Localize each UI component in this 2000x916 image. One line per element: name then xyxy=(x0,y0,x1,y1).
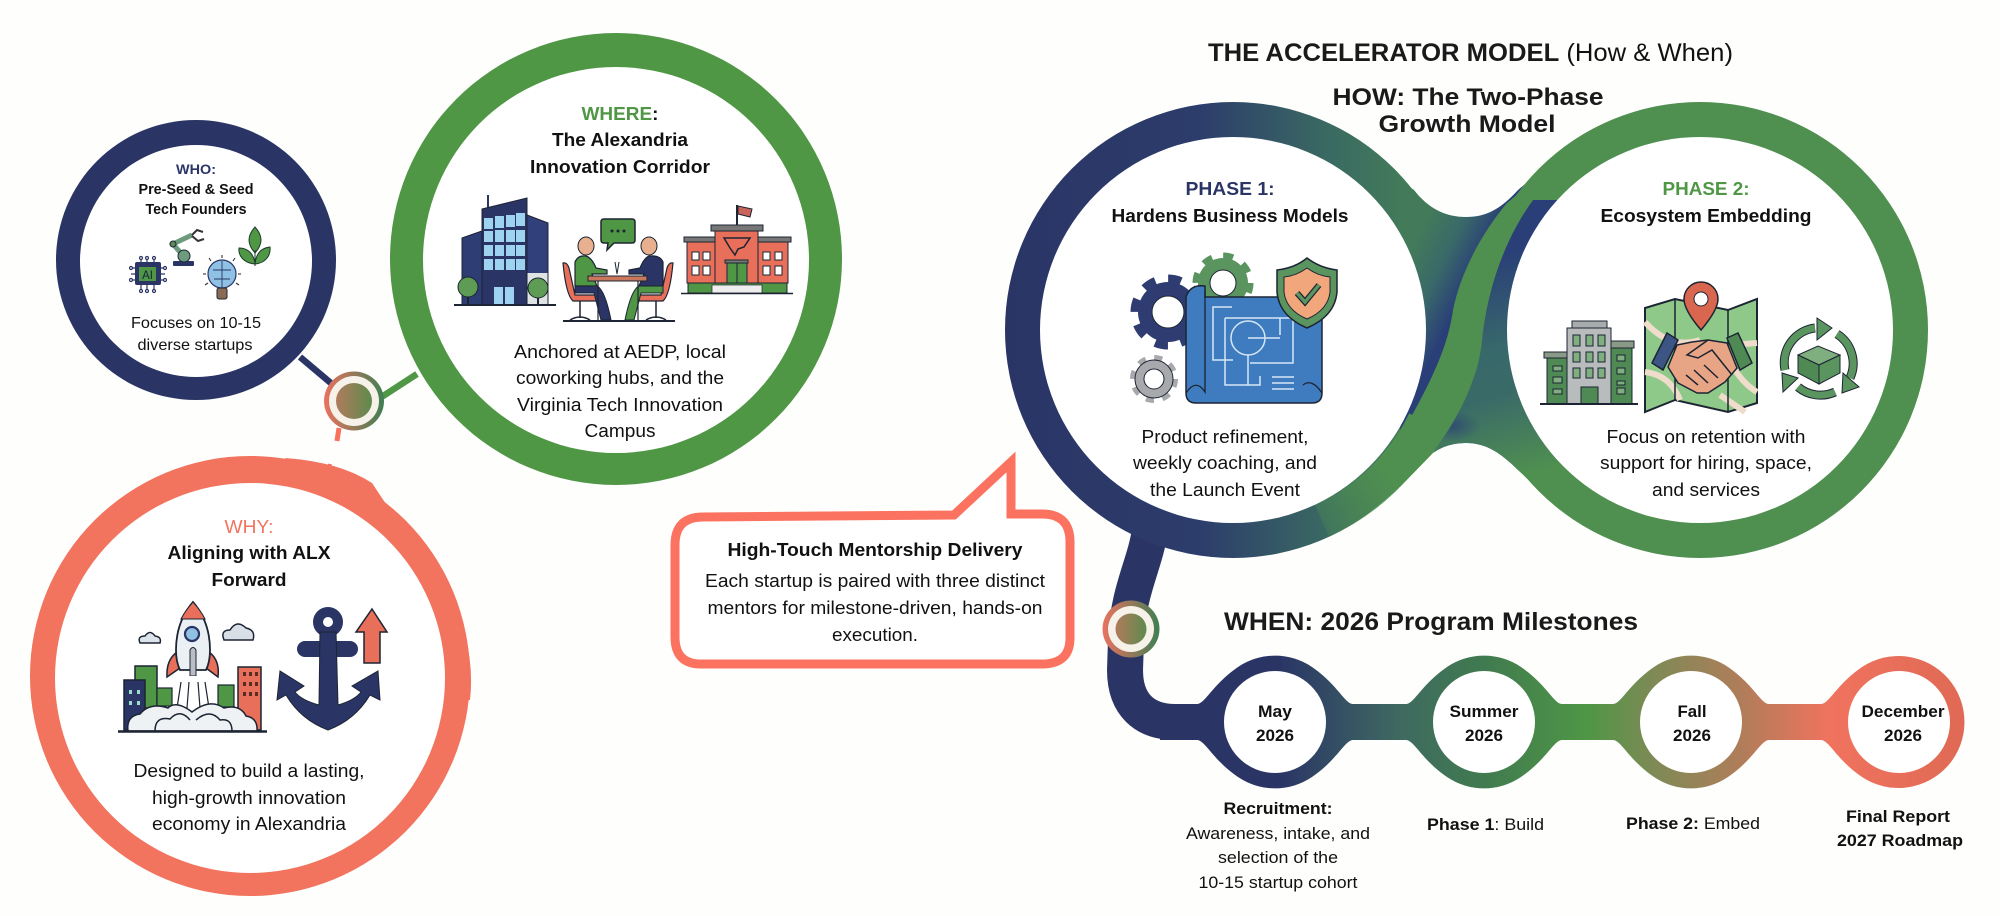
connector lines xyxy=(300,357,417,474)
who description: diverse startups xyxy=(138,337,252,354)
milestone note: final report xyxy=(1837,807,1963,850)
milestone note: recruitment: selection of the xyxy=(1218,848,1338,867)
where heading: WHERE: xyxy=(582,103,658,124)
callout: mentorship delivery: execution. xyxy=(832,624,918,645)
callout: mentorship delivery: High-Touch Mentorship Delivery xyxy=(728,539,1023,560)
phase 1 description: the Launch Event xyxy=(1150,479,1300,500)
milestone: december: December xyxy=(1862,702,1945,721)
phase 1 description: weekly coaching, and xyxy=(1132,452,1317,473)
timeline path to milestones xyxy=(1125,530,1964,788)
who heading: Tech Founders xyxy=(146,202,246,218)
who description xyxy=(131,315,261,354)
phase 2 description: and services xyxy=(1652,479,1760,500)
phase 2 description: support for hiring, space, xyxy=(1600,452,1812,473)
milestone: december: 2026 xyxy=(1884,726,1922,745)
milestone: december xyxy=(1848,671,1950,773)
icon: anchor with arrow xyxy=(277,609,387,730)
icon: circular package xyxy=(1782,318,1859,395)
icon: gears blueprint and shield xyxy=(1133,256,1337,403)
phase 1 heading: PHASE 1: xyxy=(1186,178,1274,199)
milestone: fall: Fall xyxy=(1678,702,1706,721)
where description xyxy=(514,341,726,441)
milestone note: phase 2: Phase 2: Embed xyxy=(1626,814,1760,833)
icon: meeting xyxy=(563,219,675,321)
phase 2 description xyxy=(1600,426,1812,500)
connector hub: timeline xyxy=(1102,600,1160,658)
why description: Designed to build a lasting, xyxy=(134,760,364,781)
where description: coworking hubs, and the xyxy=(516,367,724,388)
milestone: summer xyxy=(1433,671,1535,773)
heading: how xyxy=(1332,84,1604,138)
callout: mentorship delivery xyxy=(675,462,1070,664)
phase 2 heading xyxy=(1600,178,1812,226)
panel: who xyxy=(56,120,336,400)
why heading: Aligning with ALX xyxy=(168,542,331,563)
panel: why xyxy=(30,456,471,896)
heading: how: HOW: The Two-Phase xyxy=(1332,84,1604,111)
heading: when: WHEN: 2026 Program Milestones xyxy=(1224,608,1638,636)
heading: how: Growth Model xyxy=(1378,111,1556,138)
connector hub: who where why xyxy=(324,372,384,430)
icon: green building xyxy=(1540,321,1638,404)
milestone: fall xyxy=(1640,671,1742,773)
phase 1 heading: Hardens Business Models xyxy=(1112,205,1348,226)
phase 2 description: Focus on retention with xyxy=(1606,426,1806,447)
milestone note: recruitment xyxy=(1186,799,1370,892)
where heading xyxy=(530,103,710,177)
phase 2 heading: Ecosystem Embedding xyxy=(1600,205,1812,226)
milestone note: final report: 2027 Roadmap xyxy=(1837,831,1963,850)
milestone: summer: 2026 xyxy=(1465,726,1503,745)
icon: robot arm xyxy=(170,230,204,266)
phase 2 heading: PHASE 2: xyxy=(1662,178,1750,199)
icon: plant xyxy=(239,227,270,266)
who description: Focuses on 10-15 xyxy=(131,315,261,332)
icon: brain lightbulb xyxy=(203,255,241,299)
milestone note: final report: Final Report xyxy=(1846,807,1950,826)
milestone note: recruitment: Awareness, intake, and xyxy=(1186,824,1370,843)
where description: Campus xyxy=(584,420,656,441)
callout: mentorship delivery: mentors for milestone-driven, hands-on xyxy=(708,597,1042,618)
milestone note: recruitment: 10-15 startup cohort xyxy=(1198,873,1358,892)
icon: rocket over city xyxy=(118,602,267,732)
milestone: may: May xyxy=(1258,702,1293,721)
panel: phase 2 xyxy=(1472,102,1928,558)
who heading: WHO: xyxy=(176,161,216,177)
where heading: Innovation Corridor xyxy=(530,156,710,177)
why description: high-growth innovation xyxy=(152,787,346,808)
title: THE ACCELERATOR MODEL (How & When) xyxy=(1208,39,1733,67)
two-phase rings with crossing band xyxy=(1005,102,1928,558)
why description xyxy=(134,760,364,834)
phase 1 description: Product refinement, xyxy=(1142,426,1308,447)
milestone: may: 2026 xyxy=(1256,726,1294,745)
icon: university xyxy=(681,205,793,294)
where description: Anchored at AEDP, local xyxy=(514,341,726,362)
icon: AI chip: AI xyxy=(142,270,153,282)
icon: AI chip xyxy=(130,256,166,292)
icon: office building xyxy=(454,195,556,305)
callout: mentorship delivery: Each startup is paired with three distinct xyxy=(705,570,1045,591)
milestone note: recruitment: Recruitment: xyxy=(1224,799,1332,818)
milestone: summer: Summer xyxy=(1450,702,1519,721)
why description: economy in Alexandria xyxy=(152,813,347,834)
why heading xyxy=(168,516,331,590)
who heading xyxy=(138,161,254,218)
panel: phase 1 xyxy=(1005,102,1461,558)
who heading: Pre-Seed & Seed xyxy=(138,182,254,198)
where description: Virginia Tech Innovation xyxy=(517,394,723,415)
phase 1 description xyxy=(1132,426,1317,500)
panel: where xyxy=(390,33,842,485)
icon: map with pin and handshake xyxy=(1645,282,1757,412)
milestone: may xyxy=(1224,671,1326,773)
why heading: WHY: xyxy=(224,516,274,537)
milestone: fall: 2026 xyxy=(1673,726,1711,745)
phase 1 heading xyxy=(1112,178,1348,226)
why heading: Forward xyxy=(212,569,286,590)
where heading: The Alexandria xyxy=(552,129,689,150)
milestone note: phase 1: Phase 1: Build xyxy=(1427,815,1544,834)
